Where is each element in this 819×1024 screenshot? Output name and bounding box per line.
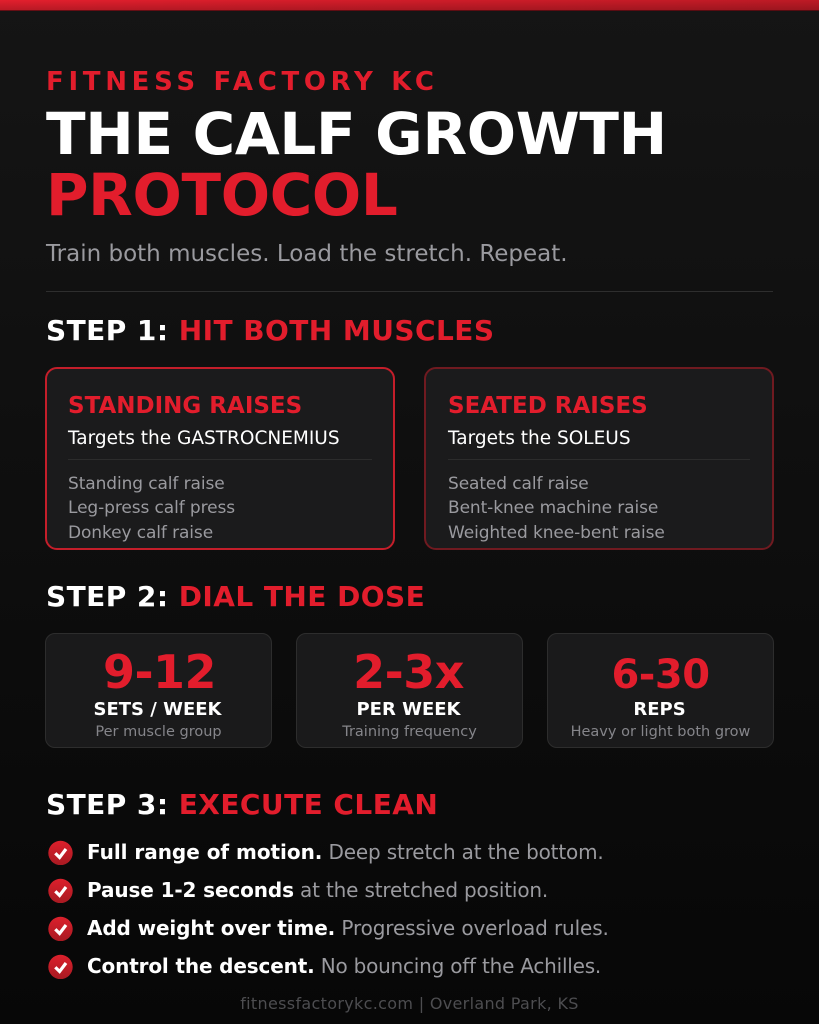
card target: Targets the SOLEUS xyxy=(448,428,631,449)
stat note: Per muscle group xyxy=(95,724,222,740)
exercise list: Seated calf raise xyxy=(448,474,589,494)
icon: check 3 xyxy=(48,916,73,941)
title: PROTOCOL xyxy=(46,161,398,229)
stat value: 6-30 xyxy=(611,652,710,698)
brand name: FITNESS FACTORY KC xyxy=(46,67,439,97)
title: THE CALF GROWTH xyxy=(46,100,667,168)
stat value: 2-3x xyxy=(353,645,464,699)
stat: frequency xyxy=(296,633,523,748)
icon: check 1 xyxy=(48,840,73,865)
stat value: 9-12 xyxy=(103,645,216,699)
stat label: REPS xyxy=(633,699,686,720)
checklist item 3: Add weight over time. Progressive overload rules. xyxy=(87,916,609,940)
card title: STANDING RAISES xyxy=(68,393,302,419)
panel: seated raises xyxy=(424,367,774,550)
subtitle: Train both muscles. Load the stretch. Repeat. xyxy=(46,241,568,267)
icon: check 2 xyxy=(48,878,73,903)
top accent bar xyxy=(0,0,819,11)
exercise list: Weighted knee-bent raise xyxy=(448,523,665,543)
footer: fitnessfactorykc.com | Overland Park, KS xyxy=(240,994,579,1013)
stat note: Training frequency xyxy=(342,724,477,740)
heading: step 1: STEP 1: HIT BOTH MUSCLES xyxy=(46,314,494,347)
header divider xyxy=(46,291,773,292)
exercise list: Standing calf raise xyxy=(68,474,225,494)
exercise list: Leg-press calf press xyxy=(68,498,235,518)
checklist item 2: Pause 1-2 seconds at the stretched position. xyxy=(87,878,548,902)
card target: Targets the GASTROCNEMIUS xyxy=(68,428,340,449)
exercise list: Donkey calf raise xyxy=(68,523,213,543)
checklist item 4: Control the descent. No bouncing off the Achilles. xyxy=(87,954,601,978)
heading: step 2: STEP 2: DIAL THE DOSE xyxy=(46,580,425,613)
panel: standing raises xyxy=(45,367,395,550)
stat label: SETS / WEEK xyxy=(93,699,222,720)
icon: check 4 xyxy=(48,954,73,979)
exercise list xyxy=(448,474,665,543)
stat label: PER WEEK xyxy=(356,699,460,720)
title xyxy=(46,100,667,229)
stat note: Heavy or light both grow xyxy=(571,724,750,740)
checklist item 1: Full range of motion. Deep stretch at the bottom. xyxy=(87,840,604,864)
exercise list xyxy=(68,474,235,543)
stat: sets per week xyxy=(45,633,272,748)
exercise list: Bent-knee machine raise xyxy=(448,498,658,518)
stat: reps xyxy=(547,633,774,748)
heading: step 3: STEP 3: EXECUTE CLEAN xyxy=(46,788,438,821)
card title: SEATED RAISES xyxy=(448,393,648,419)
